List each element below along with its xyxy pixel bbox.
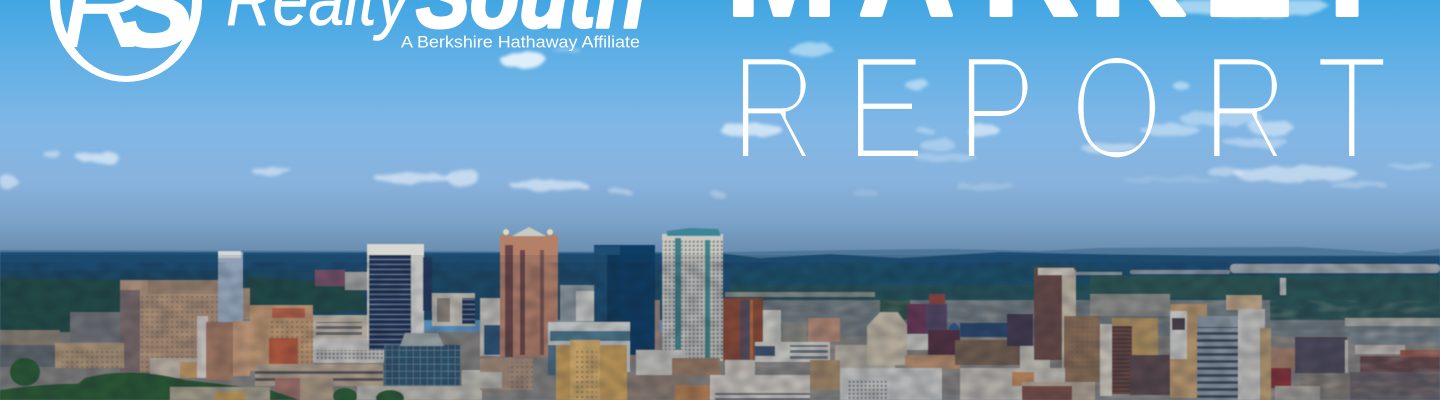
building: striped and yellow block	[1100, 318, 1158, 396]
building: dark brown right block	[1295, 337, 1348, 373]
logo: RealtySouth	[50, 0, 645, 82]
buildings: right cluster	[955, 267, 1348, 400]
building: tan block with red roof	[250, 305, 313, 371]
building: white low block with dark windows	[755, 342, 830, 362]
building: glass dome	[384, 333, 460, 389]
building: gold tower	[556, 340, 627, 400]
building: brick block	[275, 378, 333, 400]
trees	[0, 358, 404, 400]
building: navy striped tower	[367, 244, 432, 350]
building: tan rooftop	[1226, 295, 1262, 310]
building: grey glass tower	[1197, 316, 1238, 400]
building: white lower-left block	[960, 368, 1095, 400]
building: dark brown block	[1130, 355, 1190, 395]
building: dark blue glass tower	[594, 245, 655, 355]
buildings: central cluster	[462, 227, 960, 400]
tagline: A Berkshire Hathaway Affiliate	[401, 34, 640, 52]
clouds	[0, 0, 1432, 199]
building: maroon block	[907, 294, 947, 334]
building: tan tower with white face	[1170, 304, 1207, 398]
building: white tower with teal crown	[662, 228, 723, 361]
building: tan hotel	[120, 280, 218, 372]
building: white foreground block	[840, 368, 942, 400]
building: tan-brown block	[1064, 316, 1100, 382]
building: grey tower	[218, 251, 250, 322]
building: red brick tower	[723, 298, 763, 361]
buildings: left cluster	[0, 244, 502, 400]
sky background	[0, 0, 1440, 252]
distant hills and forest	[0, 247, 1440, 335]
city shading	[0, 255, 1440, 400]
title: REPORT: REPORT	[730, 24, 1389, 191]
building: white tower	[1238, 309, 1271, 400]
building: low tan block	[55, 343, 124, 368]
building: teal-window block	[548, 322, 630, 375]
building: orange tower block	[197, 316, 250, 380]
logo ring	[50, 0, 202, 82]
urban ground	[0, 276, 1440, 400]
building: white mid block	[432, 293, 475, 326]
building: brick tower	[500, 227, 558, 357]
building: cream angled tower	[867, 312, 907, 365]
building: dark maroon with dome	[928, 323, 960, 355]
building: low tan foreground	[170, 387, 270, 400]
building: brown tower	[1034, 267, 1076, 368]
building: parking deck	[255, 364, 383, 386]
